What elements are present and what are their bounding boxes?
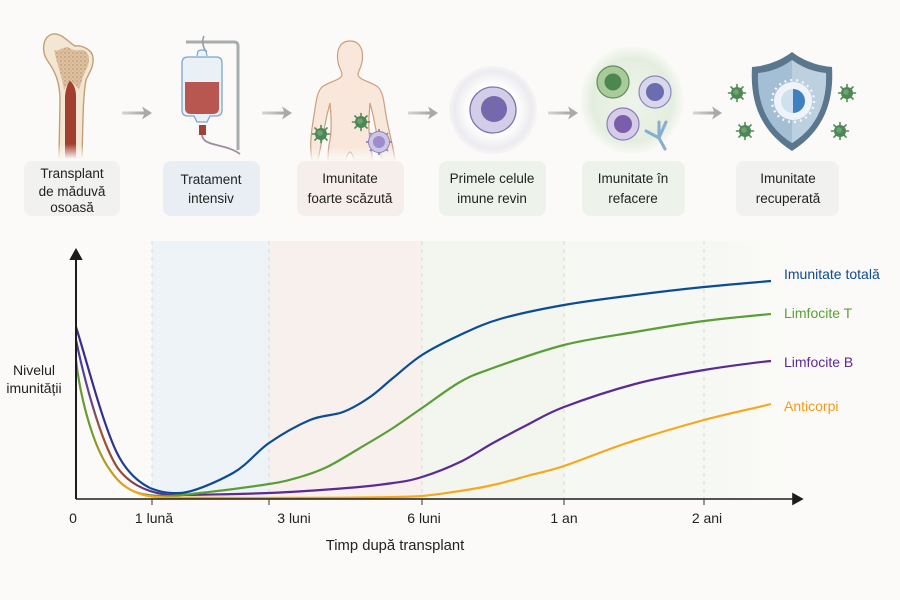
y axis title: imunității xyxy=(6,380,62,396)
panel: step 4 first immune cells return xyxy=(439,66,546,216)
label text: Imunitate xyxy=(760,171,816,186)
label text: Tratament xyxy=(180,172,242,187)
curve start: limfocite B descent xyxy=(76,340,173,495)
y axis xyxy=(71,250,81,499)
chart: immunity recovery over time xyxy=(6,241,880,554)
curve: limfocite B xyxy=(173,361,771,495)
label text: intensiv xyxy=(188,191,234,206)
x tick labels: 0 xyxy=(69,510,77,526)
label text: Imunitate xyxy=(322,171,378,186)
legend: curve labels xyxy=(784,266,880,414)
arrow 4 xyxy=(548,106,578,120)
x tick labels: 1 an xyxy=(550,510,578,526)
phase bands xyxy=(152,241,794,499)
label text: imune revin xyxy=(457,191,527,206)
label text: osoasă xyxy=(50,200,94,215)
icon: immune cell xyxy=(449,66,537,154)
curve start: green to orange descent xyxy=(76,360,133,491)
panel: step 5 immunity recovering xyxy=(580,46,685,216)
icon: femur bone xyxy=(44,34,93,159)
legend: curve labels: Limfocite T xyxy=(784,305,853,321)
label text: foarte scăzută xyxy=(308,191,393,206)
icon: IV bag xyxy=(182,36,240,154)
legend: curve labels: Limfocite B xyxy=(784,354,853,370)
label text: refacere xyxy=(608,191,658,206)
label box xyxy=(582,161,685,216)
arrow 2 xyxy=(262,106,292,120)
icon: body with viruses xyxy=(300,41,400,161)
label box xyxy=(297,161,404,216)
panel: step 1 bone marrow transplant xyxy=(24,34,120,216)
x tick labels: 2 ani xyxy=(692,510,722,526)
curve: limfocite T xyxy=(133,314,771,496)
panel: step 3 very low immunity xyxy=(297,41,404,216)
panel: step 6 recovered immunity xyxy=(728,52,856,216)
y axis title: Nivelul xyxy=(13,362,55,378)
x ticks xyxy=(152,499,704,505)
legend: curve labels: Anticorpi xyxy=(784,398,838,414)
label text: Imunitate în xyxy=(598,171,668,186)
x tick labels: 1 lună xyxy=(135,510,173,526)
panel: step 2 intensive treatment xyxy=(163,36,260,216)
curve: anticorpi xyxy=(133,404,771,498)
label text: Transplant xyxy=(40,166,104,181)
arrow 1 xyxy=(122,106,152,120)
label text: Primele celule xyxy=(450,171,534,186)
label box xyxy=(163,161,260,216)
label box xyxy=(736,161,839,216)
curve start: imunitate totală descent xyxy=(76,327,150,488)
label box xyxy=(24,161,120,216)
arrow 5 xyxy=(693,106,722,120)
x tick labels: 3 luni xyxy=(277,510,311,526)
x axis title: Timp după transplant xyxy=(326,538,464,554)
legend: curve labels: Imunitate totală xyxy=(784,266,880,282)
x tick labels: 6 luni xyxy=(407,510,441,526)
arrow 3 xyxy=(408,106,438,120)
icon: shield with cell and viruses xyxy=(728,52,856,151)
icon: cell cluster xyxy=(580,46,684,154)
label box xyxy=(439,161,546,216)
label text: de măduvă xyxy=(39,184,106,199)
x axis xyxy=(76,494,802,504)
label text: recuperată xyxy=(756,191,821,206)
curve: imunitate totală xyxy=(150,281,771,493)
